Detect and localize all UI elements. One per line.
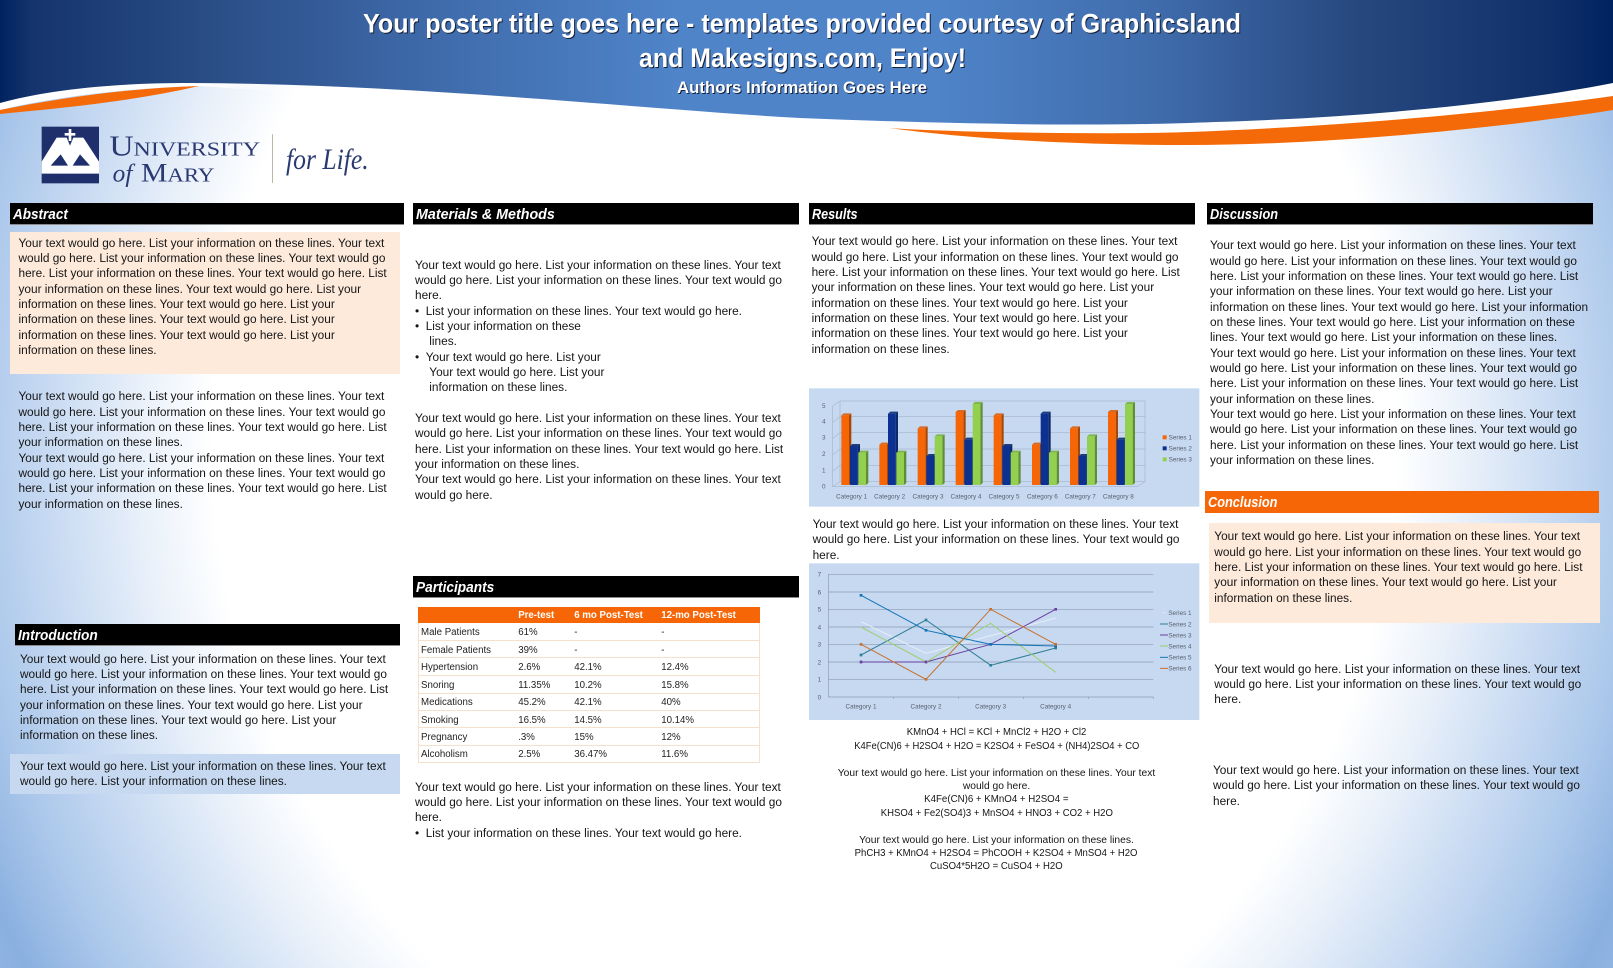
logo: University of Mary for Life: of	[113, 160, 135, 188]
text: results body: your information on these lines. Your text would go here. List your	[812, 280, 1154, 294]
text: conclusion third paragraph: here.	[1213, 794, 1240, 808]
table: participants: 16.5%	[518, 715, 546, 726]
table: participants: 15.8%	[661, 680, 689, 691]
table: participants: 42.1%	[574, 662, 602, 673]
text: conclusion highlighted: here. List your information on these lines. Your text would go here. List	[1214, 560, 1582, 574]
line chart: series 1-6 by category: 6	[818, 589, 822, 596]
heading: Abstract	[10, 203, 404, 225]
panel: abstract tinted box	[10, 232, 400, 374]
text: abstract body: your information on these lines.	[18, 435, 183, 449]
text: introduction body: would go here. List your information on these lines. Your text would go	[20, 667, 387, 681]
heading: Discussion: Discussion	[1210, 206, 1278, 223]
bar chart: series 1-3 by category: Category 8	[1103, 493, 1134, 500]
heading: Materials & Methods	[413, 203, 799, 225]
bar chart: series 1-3 by category: 4	[822, 418, 826, 425]
text: results body: information on these lines. Your text would go here. List your	[812, 311, 1128, 325]
table: participants: Smoking	[421, 715, 459, 726]
bar chart: series 1-3 by category: Category 3	[913, 493, 944, 500]
text: conclusion second paragraph: would go here. List your information on these lines. Your text would go	[1214, 677, 1581, 691]
text: chemical equations and notes: Your text would go here. List your information on these lines. Your text	[838, 768, 1155, 779]
bar chart: series 1-3 by category: 5	[822, 403, 826, 410]
text: chemical equations and notes: KHSO4 + Fe2(SO4)3 + MnSO4 + HNO3 + CO2 + H2O	[880, 808, 1113, 819]
text: participants body	[415, 780, 782, 840]
text: abstract highlighted: information on these lines.	[18, 343, 157, 357]
text: results body: information on these lines. Your text would go here. List your	[812, 326, 1128, 340]
text: discussion body: would go here. List your information on these lines. Your text would go	[1210, 254, 1577, 268]
panel: introduction blue box	[10, 754, 400, 794]
text: discussion body: Your text would go here. List your information on these lines. Your text	[1210, 346, 1576, 360]
text: materials and methods with bullets: here.	[415, 288, 442, 302]
line chart: series 1-6 by category: Category 3	[975, 704, 1007, 711]
text: abstract body: your information on these lines.	[18, 497, 183, 511]
text: results body: Your text would go here. List your information on these lines. Your text	[812, 234, 1177, 248]
line chart: series 1-6 by category: Series 3	[1168, 632, 1192, 639]
text: abstract highlighted	[18, 236, 387, 357]
text: chemical equations and notes: CuSO4*5H2O = CuSO4 + H2O	[930, 861, 1063, 872]
heading: Conclusion: Conclusion	[1208, 494, 1277, 511]
line chart: series 1-6 by category: Series 5	[1168, 655, 1192, 662]
text: conclusion third paragraph: Your text would go here. List your information on these lines. Your text	[1213, 763, 1579, 777]
bar chart: series 1-3 by category: 3	[822, 435, 826, 442]
line chart: series 1-6 by category: 7	[818, 572, 822, 579]
table: participants: .3%	[518, 732, 535, 743]
text: conclusion highlighted: your information on these lines. Your text would go here. List your	[1214, 575, 1557, 589]
text: materials and methods with bullets	[415, 258, 784, 502]
heading: Conclusion	[1205, 491, 1599, 513]
header banner with swooshes and title: and Makesigns.com, Enjoy!	[639, 43, 966, 73]
text: abstract body: would go here. List your information on these lines. Your text would go	[18, 405, 385, 419]
text: discussion body: lines. Your text would go here. List your information on these lines.	[1210, 330, 1557, 344]
table: participants: -	[574, 645, 577, 656]
text: discussion body: here. List your information on these lines. Your text would go here. List	[1210, 376, 1578, 390]
bar chart: series 1-3 by category: Category 4	[951, 493, 982, 500]
logo: University of Mary for Life: MARY	[141, 159, 214, 188]
heading: Results: Results	[812, 206, 858, 223]
bar chart: series 1-3 by category	[809, 388, 1200, 507]
text: introduction body: information on these lines.	[20, 728, 158, 742]
text: chemical equations and notes: Your text would go here. List your information on these lines.	[859, 835, 1134, 846]
table: participants: 61%	[518, 627, 538, 638]
text: materials and methods with bullets: information on these lines.	[429, 380, 567, 394]
heading: Materials & Methods: Materials & Methods	[416, 206, 555, 223]
text: materials and methods with bullets: List your information on these	[426, 319, 581, 333]
table: participants: 14.5%	[574, 715, 602, 726]
table: participants: 15%	[574, 732, 594, 743]
text: introduction body: here. List your information on these lines. Your text would go here. List	[20, 682, 388, 696]
text: conclusion highlighted: information on these lines.	[1214, 591, 1352, 605]
text: introduction highlighted	[20, 759, 386, 788]
text: abstract highlighted: your information on these lines. Your text would go here. List your	[18, 282, 361, 296]
text: introduction body: your information on these lines. Your text would go here. List your	[20, 698, 363, 712]
text: participants body: Your text would go here. List your information on these lines. Your text	[415, 780, 781, 794]
bar chart: series 1-3 by category: Category 2	[874, 493, 906, 500]
text: results body: would go here. List your information on these lines. Your text would go	[812, 250, 1178, 264]
line chart: series 1-6 by category: Series 4	[1168, 643, 1192, 650]
text: conclusion highlighted: would go here. List your information on these lines. Your text would go	[1214, 545, 1581, 559]
text: materials and methods with bullets: Your text would go here. List your	[429, 365, 604, 379]
bar chart: series 1-3 by category: Series 2	[1169, 445, 1192, 452]
text: participants body: here.	[415, 810, 442, 824]
text: materials and methods with bullets: Your text would go here. List your information on these lines. Your text	[415, 472, 781, 486]
text: discussion body: here. List your information on these lines. Your text would go here. List	[1210, 438, 1578, 452]
text: abstract highlighted: information on these lines. Your text would go here. List your	[18, 328, 335, 342]
bar chart: series 1-3 by category: Series 3	[1169, 456, 1192, 463]
text: materials and methods with bullets: •	[415, 350, 419, 364]
line chart: series 1-6 by category: 0	[818, 694, 822, 701]
bar chart: series 1-3 by category: 0	[822, 484, 826, 491]
text: chemical equations and notes: would go here.	[963, 781, 1030, 792]
table: participants: Medications	[421, 697, 473, 708]
text: introduction body: Your text would go here. List your information on these lines. Your text	[20, 652, 386, 666]
header banner with swooshes and title: Authors Information Goes Here	[677, 79, 927, 97]
header banner with swooshes and title: Your poster title goes here - templates provided courtesy of Graphicsland	[363, 8, 1241, 38]
heading: Introduction	[15, 624, 400, 646]
table: participants: Snoring	[421, 680, 454, 691]
text: participants body: List your information on these lines. Your text would go here.	[426, 826, 742, 840]
table: participants: 2.6%	[518, 662, 540, 673]
text: results second paragraph	[812, 517, 1180, 562]
text: conclusion highlighted	[1214, 529, 1582, 605]
bar chart: series 1-3 by category: Category 7	[1065, 493, 1096, 500]
line chart: series 1-6 by category: 2	[818, 659, 822, 666]
line chart: series 1-6 by category: Series 6	[1168, 666, 1192, 673]
text: abstract highlighted: would go here. List your information on these lines. Your text would go	[18, 251, 385, 265]
table: participants: Pregnancy	[421, 732, 467, 743]
table: participants: -	[661, 645, 664, 656]
table: participants: 11.35%	[518, 680, 550, 691]
text: results body: here. List your information on these lines. Your text would go here. List	[812, 265, 1180, 279]
text: introduction body: information on these lines. Your text would go here. List your	[20, 713, 336, 727]
text: results body: information on these lines.	[812, 342, 950, 356]
text: abstract highlighted: information on these lines. Your text would go here. List your	[18, 312, 335, 326]
text: chemical equations and notes: KMnO4 + HCl = KCl + MnCl2 + H2O + Cl2	[907, 727, 1086, 738]
table: participants: 36.47%	[574, 749, 607, 760]
panel: conclusion tinted box	[1209, 523, 1600, 623]
text: discussion body: on these lines. Your text would go here. List your information on these	[1210, 315, 1575, 329]
line chart: series 1-6 by category: Series 1	[1168, 610, 1192, 617]
text: discussion body	[1210, 238, 1588, 467]
line chart: series 1-6 by category: Series 2	[1168, 621, 1192, 628]
line chart: series 1-6 by category: Category 1	[846, 704, 877, 711]
table: participants: Hypertension	[421, 662, 478, 673]
heading: Participants: Participants	[416, 579, 494, 596]
text: materials and methods with bullets: would go here.	[415, 488, 493, 502]
table: participants: 45.2%	[518, 697, 546, 708]
table: participants: -	[661, 627, 664, 638]
text: materials and methods with bullets: •	[415, 304, 419, 318]
text: participants body: •	[415, 826, 419, 840]
table: participants: 12.4%	[661, 662, 689, 673]
text: abstract body: here. List your information on these lines. Your text would go here. List	[18, 481, 387, 495]
text: materials and methods with bullets: Your text would go here. List your information on these lines. Your text	[415, 258, 781, 272]
table: participants: 10.14%	[661, 715, 694, 726]
text: abstract body: here. List your information on these lines. Your text would go here. List	[18, 420, 387, 434]
table: participants: 10.2%	[574, 680, 602, 691]
text: materials and methods with bullets: would go here. List your information on these lines. Your text would go	[415, 426, 782, 440]
text: materials and methods with bullets: would go here. List your information on these lines. Your text would go	[415, 273, 782, 287]
logo: University of Mary for Life: for Life.	[286, 144, 369, 176]
line chart: series 1-6 by category: Category 2	[911, 704, 942, 711]
table: participants: 40%	[661, 697, 681, 708]
table: participants: Alcoholism	[421, 749, 468, 760]
heading: Participants	[413, 576, 799, 598]
bar chart: series 1-3 by category: Series 1	[1169, 434, 1192, 441]
table: participants: 6 mo Post-Test	[574, 610, 643, 620]
text: abstract body: would go here. List your information on these lines. Your text would go	[18, 466, 385, 480]
text: participants body: would go here. List your information on these lines. Your text would go	[415, 795, 782, 809]
text: conclusion second paragraph: Your text would go here. List your information on these lines. Your text	[1214, 662, 1580, 676]
text: abstract body	[18, 389, 387, 511]
line chart: series 1-6 by category: 5	[818, 607, 822, 614]
line chart: series 1-6 by category: Category 4	[1040, 704, 1072, 711]
table: participants: 2.5%	[518, 749, 540, 760]
text: results second paragraph: Your text would go here. List your information on these lines. Your text	[813, 517, 1178, 531]
text: materials and methods with bullets: lines.	[429, 334, 457, 348]
text: conclusion second paragraph: here.	[1214, 692, 1241, 706]
text: conclusion third paragraph: would go here. List your information on these lines. Your text would go	[1213, 778, 1580, 792]
heading: Abstract: Abstract	[13, 206, 68, 223]
text: materials and methods with bullets: Your text would go here. List your	[426, 350, 601, 364]
text: discussion body: here. List your information on these lines. Your text would go here. List	[1210, 269, 1578, 283]
text: abstract highlighted: information on these lines. Your text would go here. List your	[18, 297, 335, 311]
text: results body	[812, 234, 1180, 356]
text: materials and methods with bullets: •	[415, 319, 419, 333]
text: conclusion highlighted: Your text would go here. List your information on these lines. Your text	[1214, 529, 1580, 543]
text: results second paragraph: would go here. List your information on these lines. Your text would go	[813, 532, 1180, 546]
text: results second paragraph: here.	[813, 548, 840, 562]
text: discussion body: your information on these lines. Your text would go here. List your	[1210, 284, 1553, 298]
table: participants: 39%	[518, 645, 538, 656]
bar chart: series 1-3 by category: 1	[822, 467, 826, 474]
line chart: series 1-6 by category	[809, 563, 1200, 720]
text: abstract highlighted: Your text would go here. List your information on these lines. Your text	[18, 236, 384, 250]
text: materials and methods with bullets: here. List your information on these lines. Your text would go here. List	[415, 442, 783, 456]
table: participants: 12-mo Post-Test	[661, 610, 736, 620]
text: conclusion second paragraph	[1214, 662, 1581, 706]
text: introduction highlighted: Your text would go here. List your information on these lines. Your text	[20, 759, 386, 773]
text: abstract body: Your text would go here. List your information on these lines. Your text	[18, 389, 384, 403]
logo: University of Mary for Life: UNIVERSITY	[109, 132, 260, 163]
text: abstract body: Your text would go here. List your information on these lines. Your text	[18, 451, 384, 465]
text: introduction body	[20, 652, 388, 742]
line chart: series 1-6 by category: 3	[818, 642, 822, 649]
text: materials and methods with bullets: your information on these lines.	[415, 457, 579, 471]
text: discussion body: your information on these lines.	[1210, 392, 1374, 406]
text: discussion body: Your text would go here. List your information on these lines. Your text	[1210, 407, 1576, 421]
header banner with swooshes and title	[0, 0, 1613, 145]
text: chemical equations and notes: K4Fe(CN)6 + KMnO4 + H2SO4 =	[924, 794, 1069, 805]
line chart: series 1-6 by category: 1	[818, 677, 822, 684]
text: chemical equations and notes	[838, 727, 1156, 872]
line chart: series 1-6 by category: 4	[818, 624, 822, 631]
text: materials and methods with bullets: Your text would go here. List your information on these lines. Your text	[415, 411, 781, 425]
heading: Discussion	[1207, 203, 1593, 225]
text: materials and methods with bullets: List your information on these lines. Your text would go here.	[426, 304, 742, 318]
text: conclusion third paragraph	[1213, 763, 1580, 808]
table: participants: 42.1%	[574, 697, 602, 708]
heading: Results	[809, 203, 1195, 225]
bar chart: series 1-3 by category: 2	[822, 451, 826, 458]
text: chemical equations and notes: K4Fe(CN)6 + H2SO4 + H2O = K2SO4 + FeSO4 + (NH4)2SO4 + CO	[854, 741, 1139, 752]
bar chart: series 1-3 by category: Category 1	[836, 493, 868, 500]
table: participants: Male Patients	[421, 627, 480, 638]
text: abstract highlighted: here. List your information on these lines. Your text would go here. List	[18, 266, 387, 280]
table: participants: 12%	[661, 732, 681, 743]
bar chart: series 1-3 by category: Category 6	[1027, 493, 1058, 500]
text: discussion body: would go here. List your information on these lines. Your text would go	[1210, 361, 1577, 375]
table: participants	[418, 607, 760, 763]
text: chemical equations and notes: PhCH3 + KMnO4 + H2SO4 = PhCOOH + K2SO4 + MnSO4 + H2O	[855, 848, 1138, 859]
bar chart: series 1-3 by category: Category 5	[989, 493, 1020, 500]
text: discussion body: would go here. List your information on these lines. Your text would go	[1210, 422, 1577, 436]
table: participants: -	[574, 627, 577, 638]
logo: University of Mary for Life	[42, 126, 369, 188]
table: participants: Female Patients	[421, 645, 491, 656]
table: participants: Pre-test	[518, 610, 554, 620]
text: discussion body: information on these lines. Your text would go here. List your information	[1210, 300, 1588, 314]
text: discussion body: Your text would go here. List your information on these lines. Your text	[1210, 238, 1576, 252]
table: participants: 11.6%	[661, 749, 688, 760]
heading: Introduction: Introduction	[18, 627, 98, 644]
text: introduction highlighted: would go here. List your information on these lines.	[20, 774, 287, 788]
text: results body: information on these lines. Your text would go here. List your	[812, 296, 1128, 310]
text: discussion body: your information on these lines.	[1210, 453, 1374, 467]
